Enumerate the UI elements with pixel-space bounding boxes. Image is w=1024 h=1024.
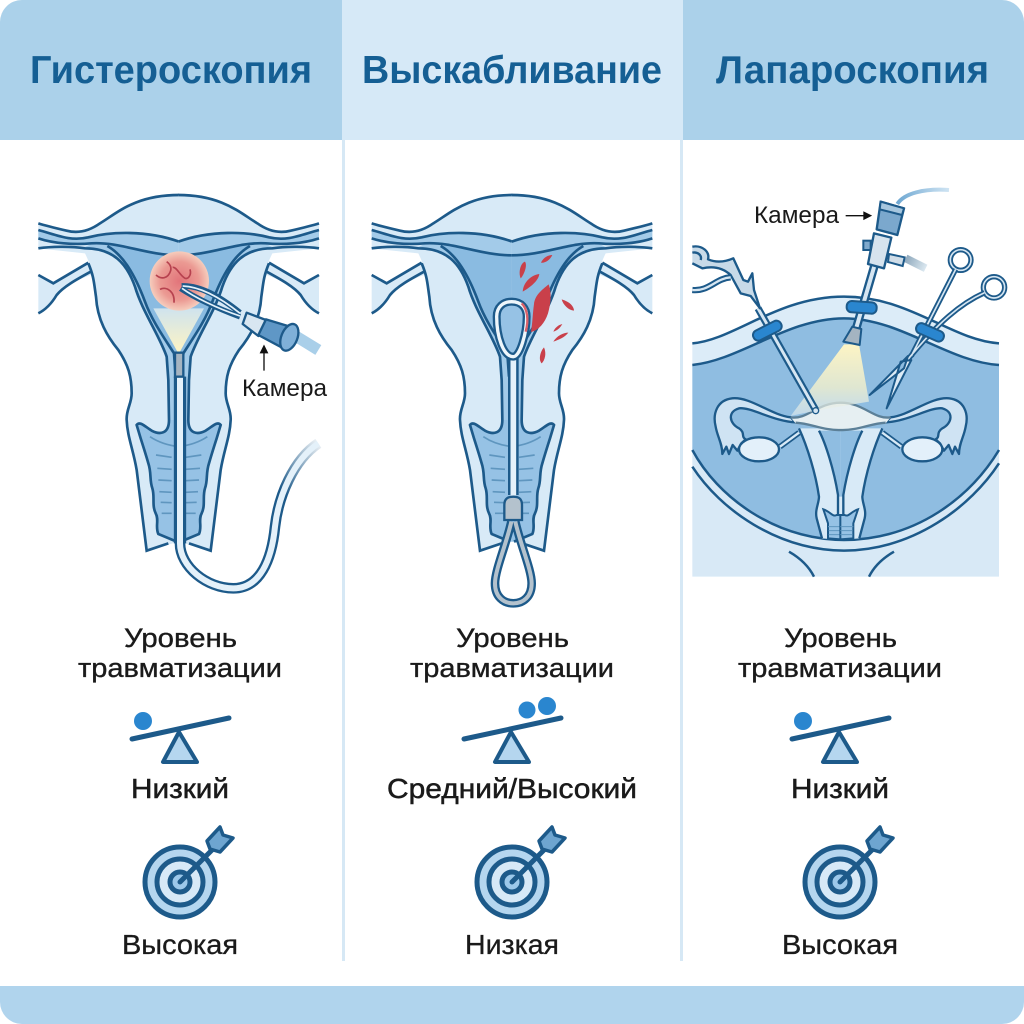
column 3 ratings [738,623,942,960]
icon: balance medium-high [464,697,561,762]
blood and tissue fragments [520,255,574,363]
icon: target [145,827,233,917]
pelvis and abdominal wall [692,297,999,577]
icon: balance low [132,712,229,762]
panel header: Гистероскопия [0,0,342,140]
label: уровень травматизации: травматизации [410,653,614,683]
label: уровень травматизации [410,623,614,683]
uterus, tubes and ovaries [715,398,967,540]
footer bar [0,986,1024,1024]
panel header: Выскабливание [342,0,683,140]
value: Низкий: Низкий [131,773,229,804]
curette loop, stem and handle [495,302,532,603]
value: Высокая: Высокая [782,929,898,960]
polyp in cavity [150,251,209,311]
value: Низкая: Низкая [465,929,559,960]
uterus anatomy [38,195,319,551]
forceps and camera head [181,286,318,353]
label: Камера: Камера [242,375,328,402]
label: уровень травматизации: травматизации [738,653,942,683]
uterus anatomy [372,195,652,551]
heading: Выскабливание: Выскабливание [362,49,662,92]
column 2 ratings [387,623,637,960]
arrow to camera [846,212,871,219]
panel: hysteroscopy illustration [38,195,328,588]
hysteroscope tube [175,353,318,588]
arrow to camera [261,346,267,371]
label: уровень травматизации [78,623,282,683]
icon: balance low [792,712,889,762]
left grasper [692,246,819,414]
icon: target [805,827,893,917]
label: уровень травматизации: Уровень [124,623,237,653]
column 1 ratings [78,623,282,960]
light beam [791,344,869,416]
panel header: Лапароскопия [683,0,1024,140]
label: уровень травматизации: Уровень [456,623,569,653]
icon: target [477,827,565,917]
light cone [153,308,204,352]
heading: Гистероскопия: Гистероскопия [30,49,312,92]
central laparoscope with camera [843,190,949,345]
label: Камера: Камера [754,202,840,229]
heading: Лапароскопия: Лапароскопия [716,49,989,92]
label: уровень травматизации: Уровень [784,623,897,653]
right scissors [870,250,1005,408]
value: Низкий: Низкий [791,773,889,804]
value: Высокая: Высокая [122,929,238,960]
panel: curettage illustration [372,195,652,603]
value: Средний/Высокий: Средний/Высокий [387,773,637,804]
panel: laparoscopy illustration [692,190,1005,577]
label: уровень травматизации [738,623,942,683]
label: уровень травматизации: травматизации [78,653,282,683]
